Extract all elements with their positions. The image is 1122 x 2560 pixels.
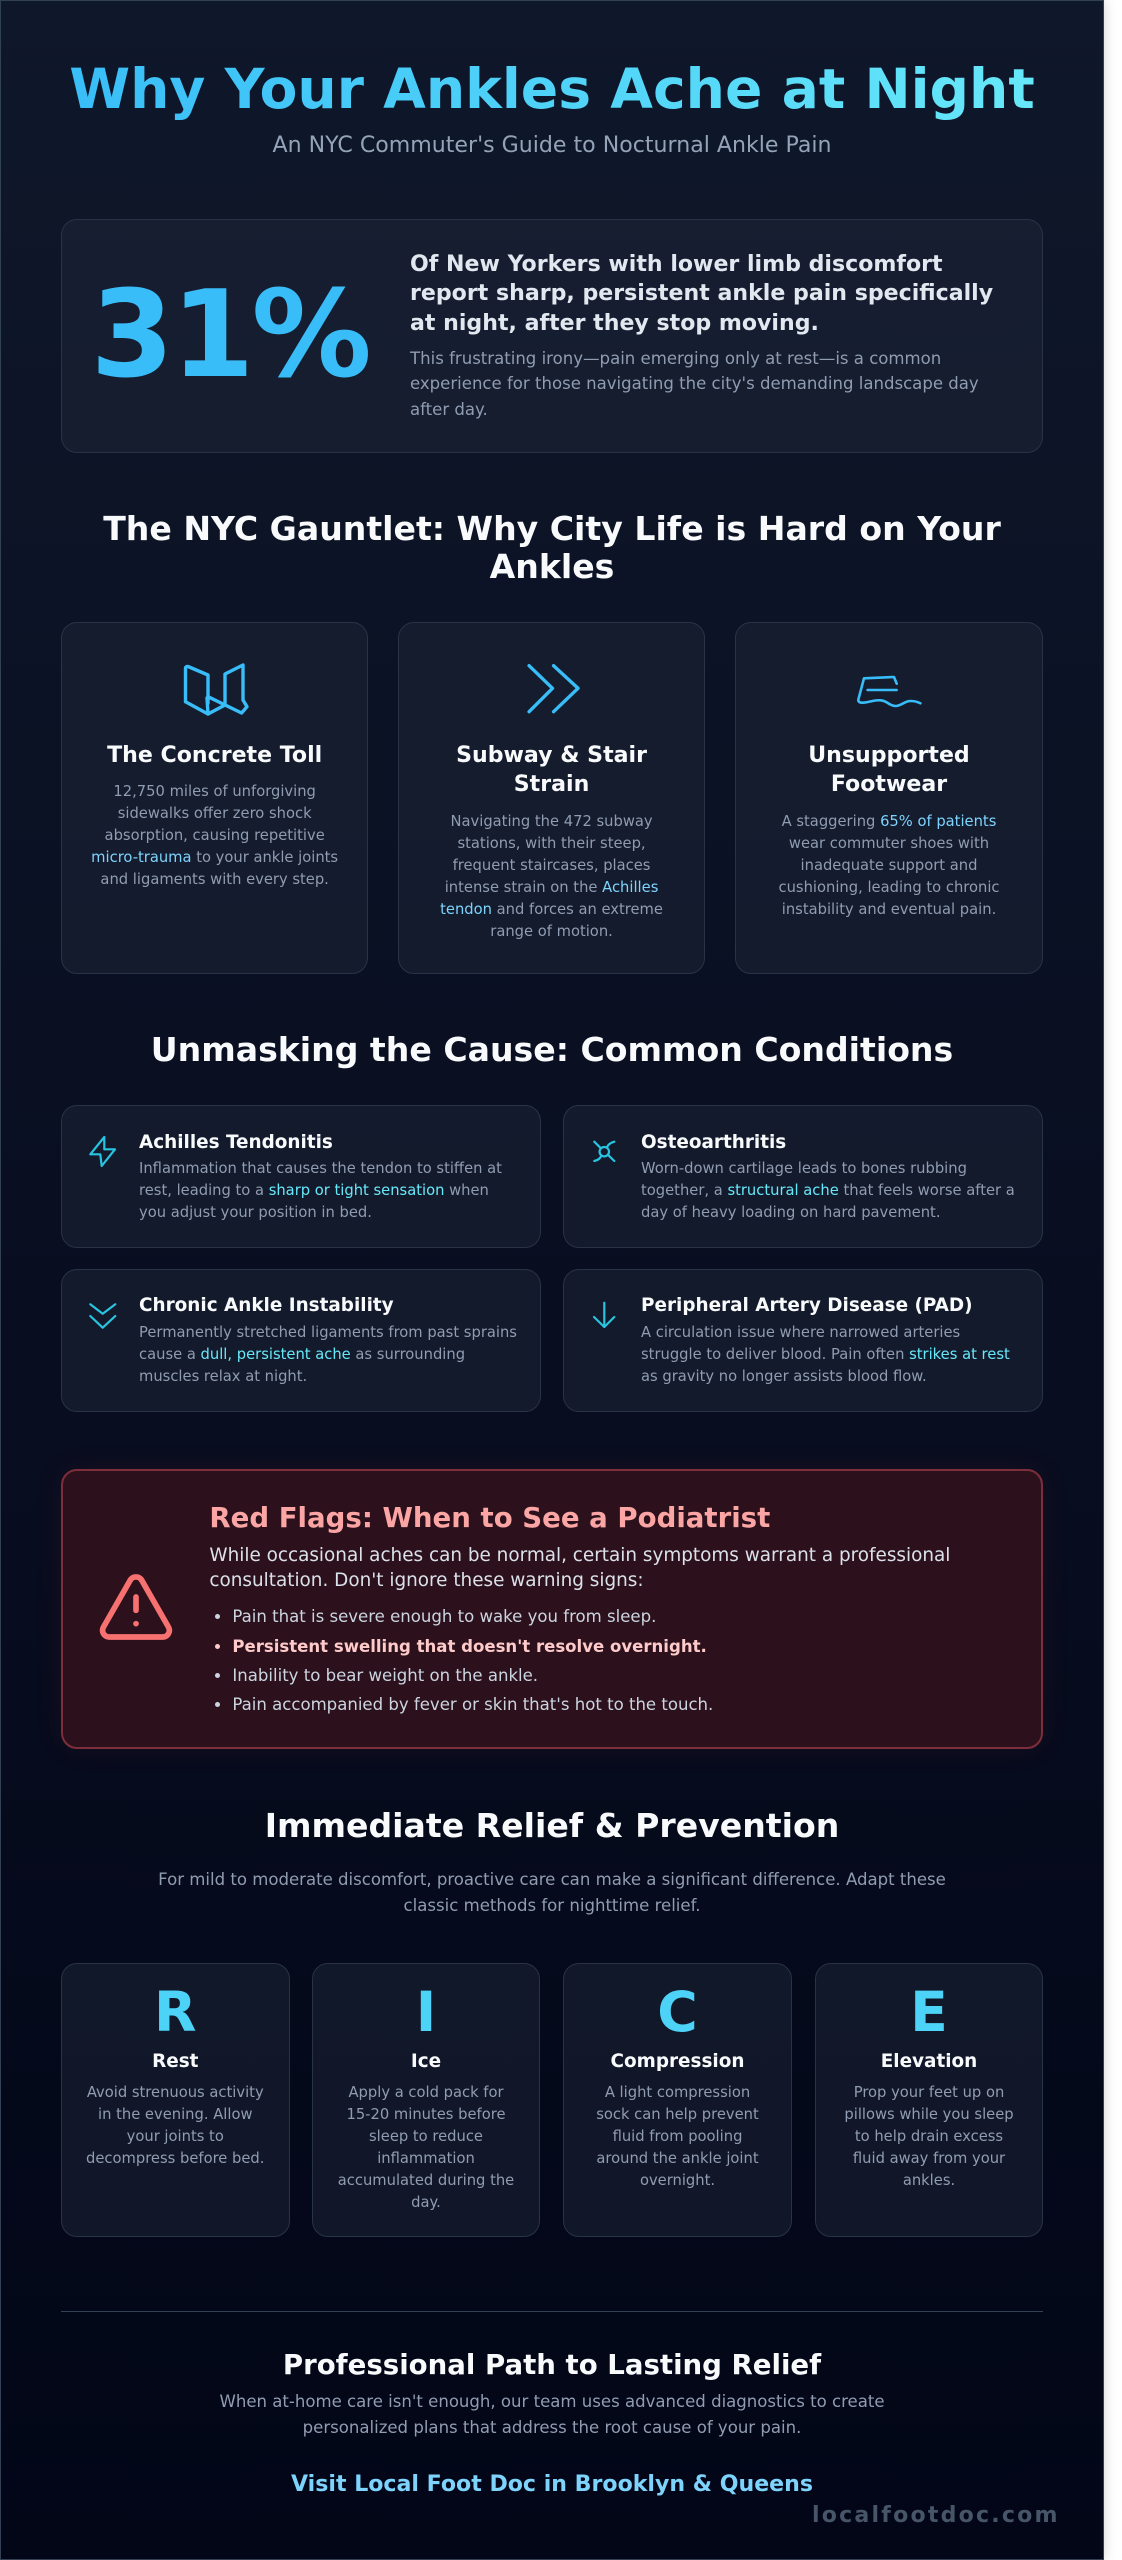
icon: down arrow xyxy=(592,1302,616,1328)
method text: sock can help prevent xyxy=(596,2106,759,2123)
card text: and ligaments with every step. xyxy=(100,871,329,888)
relief intro: classic methods for nighttime relief. xyxy=(404,1896,700,1915)
card title xyxy=(808,742,970,797)
letter I: I xyxy=(416,1980,436,2044)
method text: A light compression xyxy=(605,2084,750,2100)
card text: 12,750 miles of unforgiving xyxy=(113,783,316,800)
condition text: day of heavy loading on hard pavement. xyxy=(641,1204,940,1221)
warning signs list: Pain that is severe enough to wake you from sleep. xyxy=(232,1607,656,1626)
footer heading: Professional Path to Lasting Relief xyxy=(283,2348,821,2381)
relief intro xyxy=(158,1870,946,1915)
condition text: Inflammation that causes the tendon to stiffen at xyxy=(139,1160,502,1177)
method name: Elevation xyxy=(881,2050,977,2072)
subtitle: An NYC Commuter's Guide to Nocturnal Ankle Pain xyxy=(272,133,831,158)
condition text: Worn-down cartilage leads to bones rubbing xyxy=(641,1160,967,1177)
statistic detail: experience for those navigating the city's demanding landscape day xyxy=(410,374,979,393)
condition text xyxy=(641,1324,1010,1385)
condition text xyxy=(139,1160,502,1221)
card title xyxy=(456,742,647,797)
method text: 15-20 minutes before xyxy=(346,2106,506,2123)
statistic headline: at night, after they stop moving. xyxy=(410,311,819,336)
panel: compression xyxy=(563,1962,792,2237)
method text: ankles. xyxy=(903,2172,955,2189)
card text: A staggering 65% of patients xyxy=(782,812,996,830)
red flags heading: Red Flags: When to See a Podiatrist xyxy=(209,1501,770,1534)
method name: Rest xyxy=(152,2050,198,2072)
condition text: muscles relax at night. xyxy=(139,1368,307,1385)
card text xyxy=(778,812,1000,918)
statistic headline: report sharp, persistent ankle pain specifically xyxy=(410,281,993,306)
heading: NYC gauntlet: The NYC Gauntlet: Why City Life is Hard on Your xyxy=(103,509,1001,548)
heading: NYC gauntlet: Ankles xyxy=(490,547,614,586)
condition text: struggle to deliver blood. Pain often strikes at rest xyxy=(641,1346,1010,1363)
panel: ice xyxy=(312,1962,540,2237)
footer text: When at-home care isn't enough, our team uses advanced diagnostics to create xyxy=(219,2392,885,2411)
method text: overnight. xyxy=(640,2172,715,2189)
card text: sidewalks offer zero shock xyxy=(118,805,312,822)
method text xyxy=(844,2084,1014,2189)
method text: to help drain excess xyxy=(855,2128,1003,2145)
condition text: together, a structural ache that feels worse after a xyxy=(641,1182,1015,1199)
method text xyxy=(596,2084,759,2189)
website watermark: localfootdoc.com xyxy=(812,2503,1060,2528)
icon: shoe xyxy=(857,676,922,708)
icon: folded map xyxy=(184,663,249,716)
footer text xyxy=(219,2392,885,2437)
condition title: Achilles Tendonitis xyxy=(139,1132,333,1153)
method text: decompress before bed. xyxy=(86,2150,264,2167)
panel: headline statistic xyxy=(61,219,1043,453)
card title: Subway & Stair xyxy=(456,742,647,768)
method text: inflammation xyxy=(377,2150,475,2167)
card text: range of motion. xyxy=(490,923,613,940)
icon: lightning bolt xyxy=(89,1136,116,1168)
card title: Footwear xyxy=(831,772,947,797)
card text: inadequate support and xyxy=(801,857,977,874)
heading: NYC gauntlet xyxy=(103,509,1001,586)
panel: chronic ankle instability xyxy=(61,1269,541,1412)
panel: rest xyxy=(61,1962,290,2237)
card text: stations, with their steep, xyxy=(457,835,646,852)
statistic headline xyxy=(410,252,993,336)
call to action: Visit Local Foot Doc in Brooklyn & Queens xyxy=(291,2472,813,2497)
condition text: as gravity no longer assists blood flow. xyxy=(641,1368,927,1385)
card text: intense strain on the Achilles xyxy=(445,879,658,896)
heading: common conditions: Unmasking the Cause: Common Conditions xyxy=(151,1030,953,1069)
letter R: R xyxy=(154,1980,196,2044)
condition text xyxy=(641,1160,1015,1221)
panel: peripheral artery disease xyxy=(563,1269,1043,1412)
letter E: E xyxy=(910,1980,948,2044)
panel: osteoarthritis xyxy=(563,1105,1043,1248)
method text: Prop your feet up on xyxy=(854,2084,1004,2100)
warning signs list: Pain accompanied by fever or skin that's hot to the touch. xyxy=(232,1695,713,1714)
icon: warning triangle xyxy=(100,1574,172,1640)
card title: Strain xyxy=(514,772,589,797)
condition title: Osteoarthritis xyxy=(641,1132,786,1153)
method text: pillows while you sleep xyxy=(844,2106,1014,2123)
card text xyxy=(440,812,663,940)
method text: in the evening. Allow xyxy=(98,2106,252,2123)
method text: around the ankle joint xyxy=(596,2150,759,2167)
panel: elevation xyxy=(815,1962,1043,2237)
method text: accumulated during the xyxy=(338,2172,514,2189)
method text: sleep to reduce xyxy=(369,2128,483,2145)
condition text: Permanently stretched ligaments from past sprains xyxy=(139,1324,517,1341)
card text xyxy=(91,783,338,888)
footer text: personalized plans that address the root cause of your pain. xyxy=(303,2418,801,2437)
condition title: Peripheral Artery Disease (PAD) xyxy=(641,1295,973,1316)
big number: 31% xyxy=(90,266,369,404)
condition text xyxy=(139,1324,517,1385)
method text: fluid from pooling xyxy=(613,2128,742,2145)
card title: Unsupported xyxy=(808,742,970,768)
statistic headline: Of New Yorkers with lower limb discomfort xyxy=(410,252,943,276)
panel: the concrete toll xyxy=(61,622,368,974)
method text: Apply a cold pack for xyxy=(348,2084,504,2100)
card text: absorption, causing repetitive xyxy=(105,827,325,844)
card text: micro-trauma to your ankle joints xyxy=(91,849,338,866)
method name: Compression xyxy=(611,2050,744,2072)
statistic detail: after day. xyxy=(410,400,488,419)
panel: Achilles tendonitis xyxy=(61,1105,541,1248)
method text: day. xyxy=(411,2194,441,2211)
card text: cushioning, leading to chronic xyxy=(778,879,1000,896)
method name: Ice xyxy=(411,2050,441,2072)
card text: tendon and forces an extreme xyxy=(440,901,663,918)
red flags intro xyxy=(209,1544,950,1591)
card text: frequent staircases, places xyxy=(453,857,650,874)
statistic detail: This frustrating irony—pain emerging only at rest—is a common xyxy=(410,348,941,368)
title: Why Your Ankles Ache at Night xyxy=(69,58,1035,122)
method text xyxy=(338,2084,514,2211)
panel: red flags xyxy=(61,1469,1043,1749)
card title: The Concrete Toll xyxy=(107,742,322,768)
panel: unsupported footwear xyxy=(735,622,1043,974)
card text: wear commuter shoes with xyxy=(789,835,989,852)
heading: relief and prevention: Immediate Relief & Prevention xyxy=(265,1806,839,1845)
condition text: rest, leading to a sharp or tight sensation when xyxy=(139,1182,489,1199)
warning signs list: Persistent swelling that doesn't resolve overnight. xyxy=(232,1637,707,1656)
icon: double down chevron xyxy=(89,1303,116,1329)
method text: fluid away from your xyxy=(853,2150,1005,2167)
red flags intro: consultation. Don't ignore these warning signs: xyxy=(209,1570,644,1591)
panel: subway and stair strain xyxy=(398,622,705,974)
warning signs list xyxy=(215,1607,713,1714)
method text: your joints to xyxy=(127,2128,224,2145)
card text: Navigating the 472 subway xyxy=(450,812,653,830)
condition text: you adjust your position in bed. xyxy=(139,1204,372,1221)
relief intro: For mild to moderate discomfort, proactive care can make a significant difference. Adapt these xyxy=(158,1870,946,1889)
statistic detail xyxy=(410,348,979,419)
icon: double chevron xyxy=(527,664,580,714)
condition title: Chronic Ankle Instability xyxy=(139,1295,394,1316)
warning signs list: Inability to bear weight on the ankle. xyxy=(232,1666,538,1685)
letter C: C xyxy=(657,1980,698,2044)
method text: Avoid strenuous activity xyxy=(87,2084,264,2100)
condition text: cause a dull, persistent ache as surrounding xyxy=(139,1346,465,1363)
condition text: A circulation issue where narrowed arteries xyxy=(641,1324,960,1341)
method text xyxy=(86,2084,264,2167)
red flags intro: While occasional aches can be normal, certain symptoms warrant a professional xyxy=(209,1544,950,1566)
icon: joint xyxy=(593,1140,616,1162)
card text: instability and eventual pain. xyxy=(782,901,996,918)
